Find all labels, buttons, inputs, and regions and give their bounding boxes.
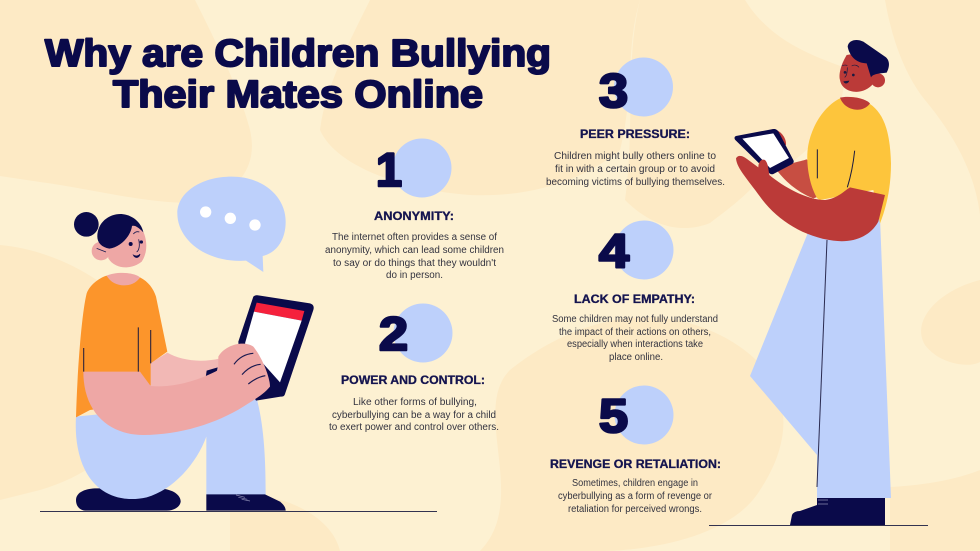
item 5: revenge or retaliation: Sometimes, children engage in [572, 478, 698, 489]
item 1: anonymity: 1 [376, 143, 402, 196]
item 2: power and control: POWER AND CONTROL: [341, 373, 485, 387]
item 3: peer pressure: becoming victims of bullying themselves. [546, 177, 725, 188]
seated woman with tablet [74, 212, 314, 511]
item 5: revenge or retaliation [550, 386, 721, 515]
shoe [790, 498, 885, 525]
item 3: peer pressure: PEER PRESSURE: [580, 127, 690, 141]
title: Their Mates Online [113, 74, 483, 116]
item 2: power and control [329, 304, 499, 433]
item 5: revenge or retaliation: 5 [599, 389, 628, 442]
item 4: lack of empathy: place online. [609, 352, 663, 363]
item 1: anonymity: do in person. [386, 270, 443, 281]
item 4: lack of empathy: Some children may not fully understand [552, 314, 718, 325]
tablet [238, 295, 314, 401]
item 2: power and control: Like other forms of bullying, [353, 397, 477, 408]
bun [74, 212, 99, 237]
tablet corner [206, 367, 218, 377]
item 2: power and control: to exert power and control over others. [329, 422, 499, 433]
head [840, 53, 877, 92]
ear [871, 73, 885, 87]
item 3: peer pressure [546, 58, 725, 188]
item 3: peer pressure: 3 [599, 64, 628, 117]
ground line right [709, 525, 928, 526]
speech bubble [177, 177, 286, 272]
back hand [772, 129, 786, 147]
item 2: power and control: cyberbullying can be a way for a child [332, 410, 496, 421]
tablet [735, 129, 794, 174]
shoe marks [818, 500, 828, 504]
shirt [76, 276, 167, 417]
back arm [777, 159, 818, 198]
title [45, 33, 551, 116]
item 1: anonymity: ANONYMITY: [374, 209, 454, 223]
front arm [736, 156, 885, 241]
back arm [150, 353, 227, 390]
finger lines [234, 353, 265, 384]
item 4: lack of empathy: the impact of their actions on others, [559, 327, 711, 338]
shoe marks [236, 495, 250, 501]
trousers [76, 398, 266, 499]
trouser crease [817, 240, 827, 487]
item 1: anonymity [325, 138, 504, 281]
hair [848, 40, 889, 77]
item 1: anonymity: The internet often provides a sense of [332, 232, 497, 243]
item 1: anonymity: to say or do things that they wouldn't [333, 258, 496, 269]
item 5: revenge or retaliation: REVENGE OR RETALIATION: [550, 457, 721, 471]
hair [97, 214, 143, 249]
wide trousers [750, 218, 891, 498]
item 2: power and control: 2 [379, 307, 408, 360]
shoe [206, 494, 286, 511]
front arm and hand [83, 344, 270, 435]
item 4: lack of empathy: LACK OF EMPATHY: [574, 292, 695, 306]
head [107, 225, 146, 267]
item 4: lack of empathy [552, 220, 718, 363]
shirt creases [817, 149, 855, 187]
shirt creases [84, 327, 151, 372]
face features [129, 242, 133, 246]
shirt [807, 97, 891, 223]
face features [844, 71, 846, 74]
item 5: revenge or retaliation: retaliation for perceived wrongs. [568, 504, 702, 515]
item 3: peer pressure: Children might bully others online to [554, 151, 717, 162]
item 5: revenge or retaliation: cyberbullying as a form of revenge or [558, 491, 713, 502]
item 1: anonymity: anonymity, which can lead some children [325, 245, 504, 256]
ground line left [40, 511, 437, 512]
title: Why are Children Bullying [45, 33, 551, 75]
ear [92, 242, 110, 260]
item 4: lack of empathy: especially when interactions take [567, 339, 704, 350]
seat [76, 488, 181, 511]
item 3: peer pressure: fit in with a certain group or to avoid [555, 164, 715, 175]
standing man with tablet [735, 40, 891, 525]
item 4: lack of empathy: 4 [599, 224, 629, 277]
